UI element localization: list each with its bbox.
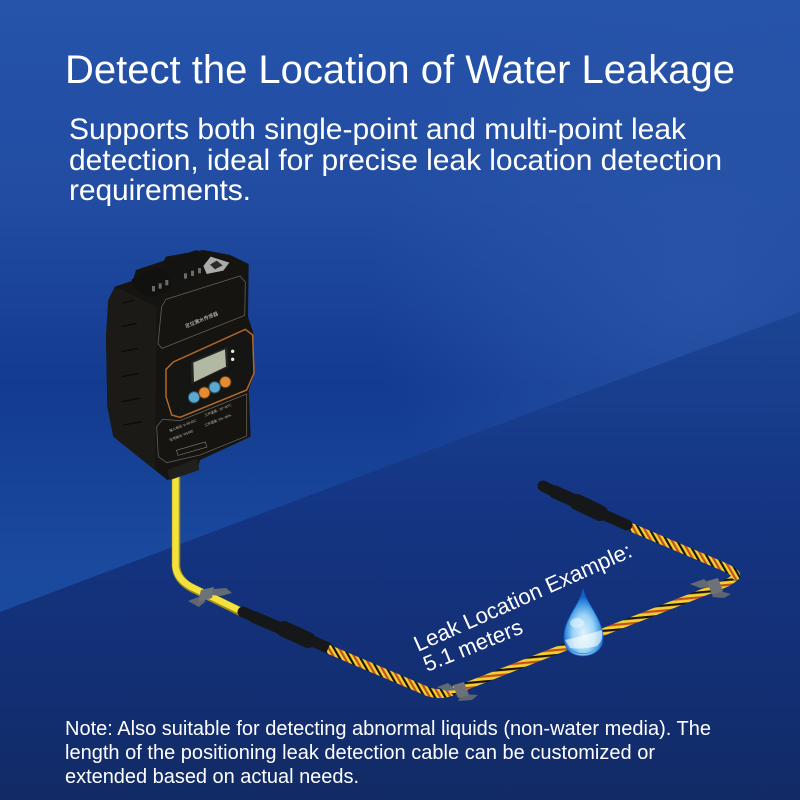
bottom panel outline — [157, 394, 247, 463]
terminal blocks — [132, 267, 172, 297]
note — [65, 718, 711, 788]
clip: left — [188, 587, 232, 607]
intro text: requirements. — [69, 174, 251, 207]
yellow cable — [176, 472, 241, 612]
background floor — [0, 312, 800, 800]
rope: far segment — [628, 526, 736, 576]
rope: long segment — [454, 574, 736, 691]
callout: leak location: 5.1 meters — [420, 614, 526, 677]
clip: middle — [437, 682, 478, 701]
spec lines: 信号输出: RS485 — [169, 428, 194, 442]
clip: right — [690, 578, 731, 598]
buttons — [188, 392, 200, 403]
note: Note: Also suitable for detecting abnormal liquids (non-water media). The — [65, 718, 711, 740]
network port — [203, 257, 229, 274]
orange panel — [166, 329, 254, 417]
note: extended based on actual needs. — [65, 766, 359, 788]
spec lines: 输入电压: 9-36VDC — [169, 417, 198, 433]
note: length of the positioning leak detection cable can be customized or — [65, 742, 655, 764]
icon: water drop — [564, 589, 603, 656]
title: Detect the Location of Water Leakage — [65, 48, 735, 92]
device label: 定位漏水传感器 — [184, 310, 219, 330]
callout: leak location: Leak Location Example: — [410, 538, 636, 657]
intro text — [69, 113, 722, 207]
connector: left — [243, 612, 328, 648]
spec lines — [169, 402, 233, 442]
top panel outline — [158, 276, 245, 348]
connector: far end — [543, 486, 627, 525]
lcd — [191, 347, 228, 384]
bottom terminal — [167, 458, 199, 480]
intro text: Supports both single-point and multi-point leak — [69, 113, 687, 146]
device body — [106, 250, 255, 480]
device side — [106, 287, 157, 470]
rope: first segment — [328, 649, 456, 694]
device: sensor controller — [106, 250, 255, 480]
spec lines: 工作湿度: 5%~95% — [204, 412, 232, 428]
background wall highlight — [300, 0, 800, 620]
bottom terminal row — [177, 442, 207, 455]
intro text: detection, ideal for precise leak location detection — [69, 144, 722, 177]
indicator leds — [231, 350, 234, 353]
spec lines: 工作温度: -20~60℃ — [204, 402, 233, 418]
